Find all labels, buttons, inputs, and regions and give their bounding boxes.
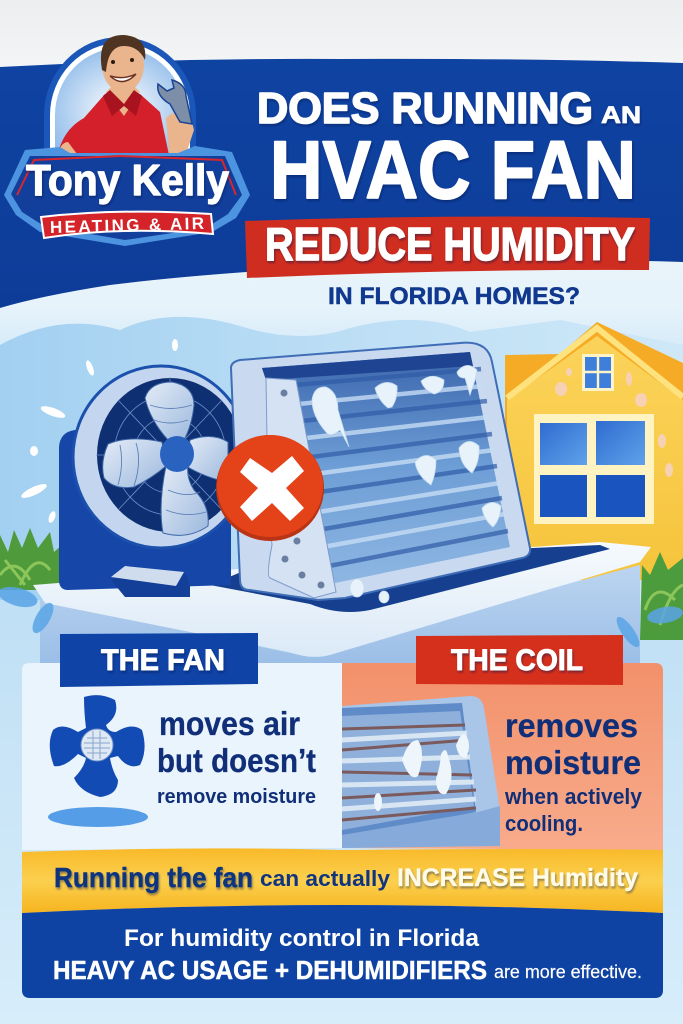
plants right [640,552,683,640]
coil droplets [312,365,501,603]
coil tab: THE COIL [451,644,583,677]
red banner: REDUCE HUMIDITY [265,218,635,270]
logo ribbon: HEATING & AIR [50,214,204,237]
fan unit [59,366,249,597]
callout: yellow band: Running the fan [54,862,253,893]
conclusion line 2: HEAVY AC USAGE + DEHUMIDIFIERS [53,955,487,985]
title line 1: AN [601,102,641,129]
fan cage [97,378,243,532]
coil panel droplets [374,734,469,811]
coil bracket [266,378,336,598]
platform well [210,545,610,612]
fan blade ribs [118,405,206,515]
plants left [0,528,62,590]
logo circle badge [44,37,196,160]
splash droplets [20,339,178,524]
icon: fan blades [50,695,145,797]
roof trim [507,328,683,398]
platform front faces [40,565,640,700]
title line 1: DOES RUNNING [257,84,593,133]
icon: red X badge [216,435,324,541]
platform top [33,542,651,657]
coil tab [416,635,623,685]
coil text: removes [505,707,638,744]
house wall [507,336,683,580]
panel: the coil [342,635,663,850]
coil text: cooling. [505,811,583,836]
fan text: remove moisture [157,786,316,808]
coil fins [272,369,508,566]
logo hexagon plate [4,146,250,246]
fan blades [103,382,228,535]
fan text: moves air [159,705,300,742]
icon: wrench [158,80,192,124]
callout: yellow band: can actually [260,866,391,891]
logo: Tony Kelly Heating & Air [4,35,250,246]
title line 2: HVAC FAN [270,125,636,216]
mascot [57,35,194,160]
header band [0,59,683,308]
logo wordmark: Tony Kelly [26,156,229,205]
coil unit [231,343,530,603]
fan hub [160,436,194,472]
fan text: but doesn’t [157,742,316,779]
coil text: moisture [505,744,641,781]
panel: conclusion [22,905,663,998]
panel: the fan [22,633,342,850]
attic window [582,354,614,391]
callout: yellow band [22,848,663,913]
fan tab: THE FAN [101,644,225,677]
fan tab [60,633,258,687]
title [245,84,650,310]
back roof [505,322,683,470]
subtitle: IN FLORIDA HOMES? [328,283,580,310]
sky clouds [0,317,683,600]
conclusion line 1: For humidity control in Florida [124,925,480,952]
coil housing [231,343,530,600]
coil text [504,707,643,836]
main window [534,414,654,524]
callout: yellow band: INCREASE Humidity [397,864,638,892]
coil text: when actively [504,784,643,809]
coil illustration [342,696,500,848]
platform [33,542,651,700]
fan control box [111,566,190,597]
conclusion line 2: are more effective. [494,962,642,982]
leaves [0,583,683,650]
fan ring [73,366,249,548]
fan text [157,705,316,808]
fan cabinet [59,430,231,590]
wall droplets [555,368,673,477]
coil face [262,352,510,583]
coil top band [262,352,473,380]
illustration: house [505,322,683,580]
icon shadow [48,807,148,827]
